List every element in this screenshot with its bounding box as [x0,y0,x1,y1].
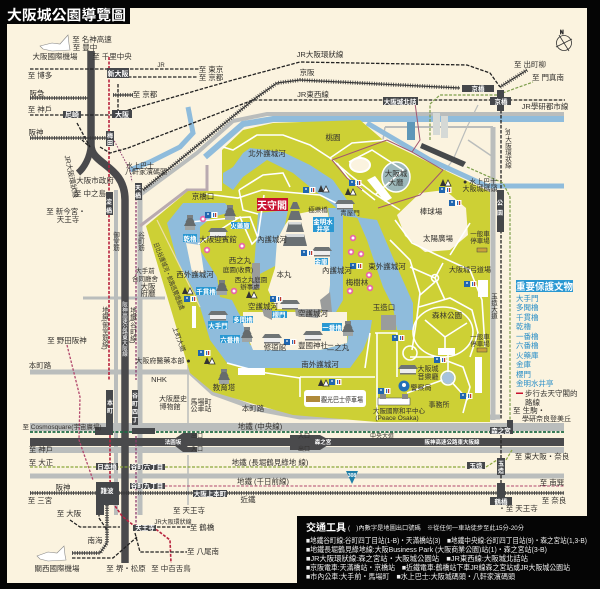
park place labels: 南外護城河 [301,359,339,369]
park place labels: 青屋門 [340,208,360,217]
map labels west: 天王寺 [57,215,80,224]
map labels west: 至 京都 [133,89,158,99]
police icon [398,380,410,392]
station names: 日本橋 [97,462,117,471]
accessibility and toilet icons [184,180,476,399]
map labels east: 中央大道 [370,432,394,440]
transportation lines: ■市內公車:大手前・馬場町 ■水上巴士:大阪城碼頭・八軒家濱碼頭 [306,571,515,581]
park place labels: 太陽廣場 [423,233,453,243]
map labels west: 至 中百舌鳥 [151,563,191,573]
park place labels: 日比谷護城河・航路巡覽遊船處 [152,241,187,311]
station names: 難波 [100,486,114,495]
blue heritage labels: 大手門 [208,321,228,330]
map labels west: 入口 [191,446,203,453]
map labels west: 至 博多 [28,70,53,80]
property list: 大手門 [516,293,538,303]
park place labels: 教育塔 [213,382,236,392]
heading: important properties: 重要保護文物 [516,281,573,293]
blue heritage labels: 金明水 [313,217,333,226]
map labels west: JR大阪環狀線 [154,518,192,526]
station names [65,69,511,532]
station names: 橋 [135,192,141,200]
park place labels: 本町路 [242,403,265,413]
park place labels: 停車場 [470,339,490,348]
park place labels [152,132,498,422]
halls and gates [208,200,418,374]
station names: 大阪城北詰 [384,97,417,106]
station names: 造 [498,467,504,475]
station names: 新大阪 [108,69,128,78]
property list: 櫻門 [516,369,531,379]
icon: airplane north [40,35,70,51]
property list: 金庫 [516,359,531,369]
map labels west: 府廳 [140,288,156,298]
park place labels: 二之丸 [327,342,350,352]
property list [516,293,554,388]
map labels west: NHK [151,375,167,384]
property list: 火藥庫 [516,350,539,360]
map labels west: 至 鶴橋 [190,522,215,532]
station names: 京橋 [494,97,508,106]
map labels west: 公車站 [190,404,212,413]
map labels east: 玉造大道 [490,293,498,320]
map labels west: 至 野田阪神 [47,335,87,345]
park place labels: 西之丸庭園 [235,275,267,284]
station names: 京橋 [472,84,485,93]
map labels west: 本町路 [29,360,52,370]
map labels west: 地鐵(谷町線) [128,305,137,343]
park place labels: 京橋口 [192,191,214,201]
map labels west: 地鐵 (千日前線) [237,476,290,486]
station names: 町 [107,408,113,415]
park place labels: 本丸 [276,269,292,279]
map labels east: JR學研都市線 [522,101,569,111]
map labels east: JR大阪環狀線 [297,49,344,59]
station names: 鶴橋 [494,497,508,506]
map labels west: 八軒家濱碼頭 [125,167,167,176]
map labels west: 至 神戶 [29,444,53,454]
expressway ramps [170,433,333,452]
subway and train dashed lines [30,57,565,563]
map labels east: 阪神高速公路東大阪線 [424,438,480,446]
station names: 四 [132,409,138,416]
map labels west: 至 大阪 [57,508,82,518]
map labels west: 法圓坂 [165,438,182,446]
park place labels: 大阪迎賓館 [199,234,237,244]
park place labels: 內護城河 [257,234,287,244]
park place labels: 修道館 [264,342,287,352]
map labels east: JR大阪環狀線 [504,128,512,168]
moats [167,148,413,368]
map labels west: 至 東京 [199,64,224,74]
sign: route 308 [346,471,358,484]
map labels east: 至 南巽 [540,477,565,487]
icon: north compass [556,30,572,51]
tourist bus parking panel [304,390,366,407]
blue heritage labels: 多聞櫓 [233,315,253,324]
map labels east [297,49,571,513]
map labels west: 大阪歷史 [159,394,187,403]
park place labels: 西之丸 [229,255,252,265]
map labels east: 森之宮 [315,438,332,446]
park place labels: 大廳 [388,177,404,187]
park place labels: 大阪城弓道場 [449,265,491,274]
transportation lines: ■JR大阪環狀線:森之宮站・大阪城公園站 ■JR東西線:大阪城北詰站 [306,553,528,563]
sign: route 308: 308 [348,473,356,479]
blue heritage labels: 六番櫓 [220,335,240,344]
map labels west: 至 新今宮・ [46,206,86,216]
park place labels: 一般車 [470,332,490,341]
park place labels: 梅樹林 [346,277,369,287]
station names: 淀 [106,198,112,206]
icon: airplane south [37,546,66,561]
blue heritage labels: 乾櫓 [184,234,197,243]
park place labels: 辦事處 [240,282,260,291]
panel: transportation [306,521,587,581]
map labels east: 學研奈良登美丘 [522,414,571,423]
station names: 谷 [132,392,138,400]
map labels west: 至 天王寺 [173,506,206,515]
map labels west: 御堂筋 [112,230,120,252]
park place labels: 警察局 [410,383,432,392]
station names: 大阪上本町 [194,489,227,498]
property list: 乾櫓 [516,321,531,331]
map labels west: 至 中之島 [74,188,107,198]
station names: 公 [497,199,503,207]
transportation note: ( )內數字是地圖出口號碼 ※從任何一車站徒步至此15分-20分 [348,524,524,532]
park place labels: 桃園 [326,132,340,142]
park place labels: (Peace Osaka) [375,415,419,422]
park green ground [146,120,490,422]
park place labels: 停車場 [470,236,490,245]
map labels east: 至 生駒・ [513,405,545,415]
park place labels: 內護城河 [322,265,352,275]
property list: 多聞櫓 [516,302,539,312]
solid white path blocks [192,176,488,393]
map labels west: 合同廳舍 [132,274,158,283]
map labels east: 入口 [298,433,310,440]
map labels east: 京阪 [300,67,315,77]
stone walls [252,263,396,330]
park place labels: ● 水上巴士 [463,177,497,186]
property list: 千貫櫓 [516,312,539,322]
map labels west: 地鐵 (中央線) [238,421,283,431]
blue heritage labels: 櫻門 [272,310,286,319]
park place labels: 上町大道 [171,325,188,353]
station names: 橋 [106,207,112,215]
map labels west: 至 堺・松原 [106,563,146,573]
park place labels: 東外護城河 [368,261,406,271]
map labels west [22,34,309,573]
ninomaru south [243,312,347,350]
map labels west: 阪神 [56,482,70,492]
west cream strip [186,243,204,273]
map labels west: 大手前 [135,266,155,275]
castle keep [283,202,307,246]
station names: 町 [132,401,138,408]
honmaru [268,208,330,309]
station names: 大阪 [115,110,129,119]
blue heritage labels: 井亭 [316,224,330,233]
rest house icons [182,179,451,386]
park place labels: 大阪城碼頭 [462,184,498,193]
transportation lines [306,535,587,581]
expressway [30,51,564,563]
park place labels: 庭園(收費) [223,265,253,274]
map labels west: 至 名神高速 [72,34,112,44]
map labels east: 至 出町柳 [514,59,546,69]
transportation lines: ■地鐵長堀鶴見綠地線:大阪Business Park (大阪商業公園)站(1)・森之宮站(3-B) [306,544,547,554]
road network [30,105,564,515]
blue heritage labels: 火藥庫 [230,221,250,230]
park place labels: 大阪城 [385,168,408,178]
walking route [332,103,443,208]
map labels west: 至 神戶 [28,104,52,114]
parking icons [477,248,487,352]
tourist bus parking panel: 觀光巴士停車場 [321,395,363,404]
park place labels: 一般車 [470,229,490,238]
map labels west: 谷町筋 [136,230,145,252]
park place labels: 極樂橋 [308,205,328,214]
map labels west: 地鐵(御堂筋線) [100,305,109,350]
property list: 金明水井亭 [516,378,554,388]
map labels west: 阪神高速公路東大阪線 [121,300,128,357]
blue heritage labels [183,217,342,344]
map labels east: 至 東大阪・奈良 [515,451,570,461]
property list: 六番櫓 [516,340,539,350]
map labels east: 至 門真南 [532,72,565,82]
map labels west: 阪急 [30,88,45,98]
map labels west: 阪神 [28,127,44,137]
park place labels: 空護城河 [248,301,278,311]
station names: 玉 [498,461,504,468]
walking route legend: 步行去天守閣的 [525,388,578,398]
park place labels: 北外護城河 [248,148,286,158]
park place labels: 事務所 [428,400,450,409]
map labels west: 大阪府醫藥本部 ● [135,356,191,365]
station names: 天王寺 [135,524,155,532]
NE buildings [407,113,466,167]
map labels west: 至 Cosmosquare(宇宙廣場) [22,422,102,431]
map labels west: 南海 [88,535,103,545]
title: 大阪城公園導覽圖 [7,7,126,23]
map labels east: ・至 天王寺 [498,504,538,513]
transportation heading: 交通工具 [306,521,346,534]
map labels west: 至 千里中央 [92,51,132,61]
map labels west: 至 大正 [29,457,54,467]
station names: 谷町六丁目 [131,462,163,471]
map labels east: 至 奈良 [542,495,567,505]
map labels west: 近鐵 [240,494,256,504]
map labels west: 至 京都 [199,72,224,82]
park place labels: 豐國神社 [298,340,328,350]
park place labels: 空護城河 [298,308,328,318]
transportation lines: ■京阪電車:天滿橋站・京橋站 ■近鐵電車:鶴橋站下車JR線森之宮站或JR大阪城公園站 [306,562,570,572]
station names: 園 [497,210,503,217]
map labels west: 至 三宮 [28,495,52,505]
station names: 丁 [132,417,138,424]
inner west moat [254,210,288,275]
stations [63,68,513,531]
park place labels: 大阪國際和平中心 [373,406,426,415]
river: Yodo and Neya [130,107,564,186]
map labels west: 大阪國際機場 [32,51,78,61]
map labels west: 關西國際機場 [34,563,80,573]
oval ground and hall [350,158,410,192]
inner east moat [325,208,343,312]
station names: 谷町九丁目 [131,481,163,490]
walking route legend: 路線 [525,397,540,407]
station names: 尼崎 [65,110,79,119]
station names: 本 [107,399,113,407]
north outer moat [223,148,358,218]
tenshukaku label: 天守閣 [257,199,287,212]
blue heritage labels: 金庫 [314,257,328,266]
park place labels: 棒球場 [420,206,443,216]
station names: 森之宮 [491,426,511,435]
walking route legend [516,388,578,407]
east outer moat [357,217,413,330]
park place labels: 西外護城河 [176,269,214,279]
map labels east: JR東西線 [297,89,329,99]
plum blossom markers [200,216,373,294]
station names: 天 [135,185,141,192]
hatched rail lines [30,70,564,553]
park place labels: 音樂廳 [418,372,438,381]
map labels west: 至 豐中 [73,42,97,52]
park place labels: 大阪城 [418,364,438,373]
map labels east: 出口 [298,445,310,453]
map labels west: 博物館 [160,402,180,411]
station names: 玉造 [470,461,483,470]
property list: 一番櫓 [516,331,539,341]
blue heritage labels: 一番櫓 [322,323,342,332]
turrets [184,205,354,384]
map labels west: 水上巴士 [126,161,154,170]
white park paths [157,135,485,420]
map labels west: 至 八尾南 [187,546,220,556]
panel: important cultural properties [516,280,578,407]
map labels west: JR [157,63,165,69]
title [0,0,130,24]
map labels west: 出口 [191,432,203,440]
peace osaka building [378,394,410,405]
station names: 梅 [107,132,113,140]
blue heritage labels: 千貫櫓 [196,287,216,296]
map labels west: JR大阪環狀線 [63,154,80,199]
park place labels: 森林公園 [432,310,462,320]
park place labels: 玉造口 [373,302,395,312]
west and south moat [167,203,372,368]
cream taiyo plaza [397,190,468,252]
map labels west: 地鐵 (長堀鶴見綠地 線) [232,457,309,467]
station names: 田 [107,140,113,147]
icon: north compass: N [560,30,564,36]
map labels west: 馬場町 [190,397,212,406]
map labels west: 大阪市政府 [76,175,114,185]
map labels west: 大阪 [140,281,156,291]
